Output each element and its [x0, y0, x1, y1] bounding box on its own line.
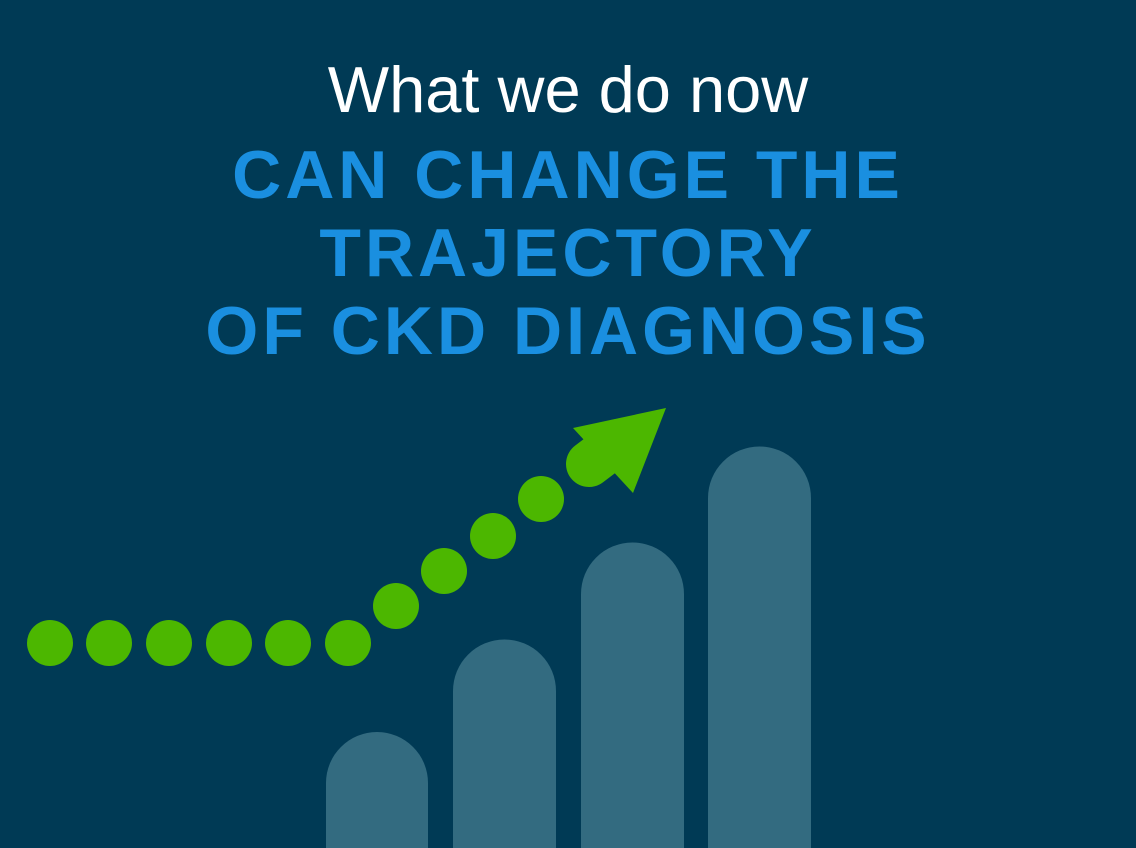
headline	[205, 137, 931, 369]
bar chart	[326, 446, 811, 848]
headline: CAN CHANGE THE	[232, 137, 904, 213]
title: What we do now	[328, 53, 808, 126]
dotted trajectory arrow	[27, 408, 666, 666]
headline: OF CKD DIAGNOSIS	[205, 293, 931, 369]
headline: TRAJECTORY	[319, 215, 817, 291]
